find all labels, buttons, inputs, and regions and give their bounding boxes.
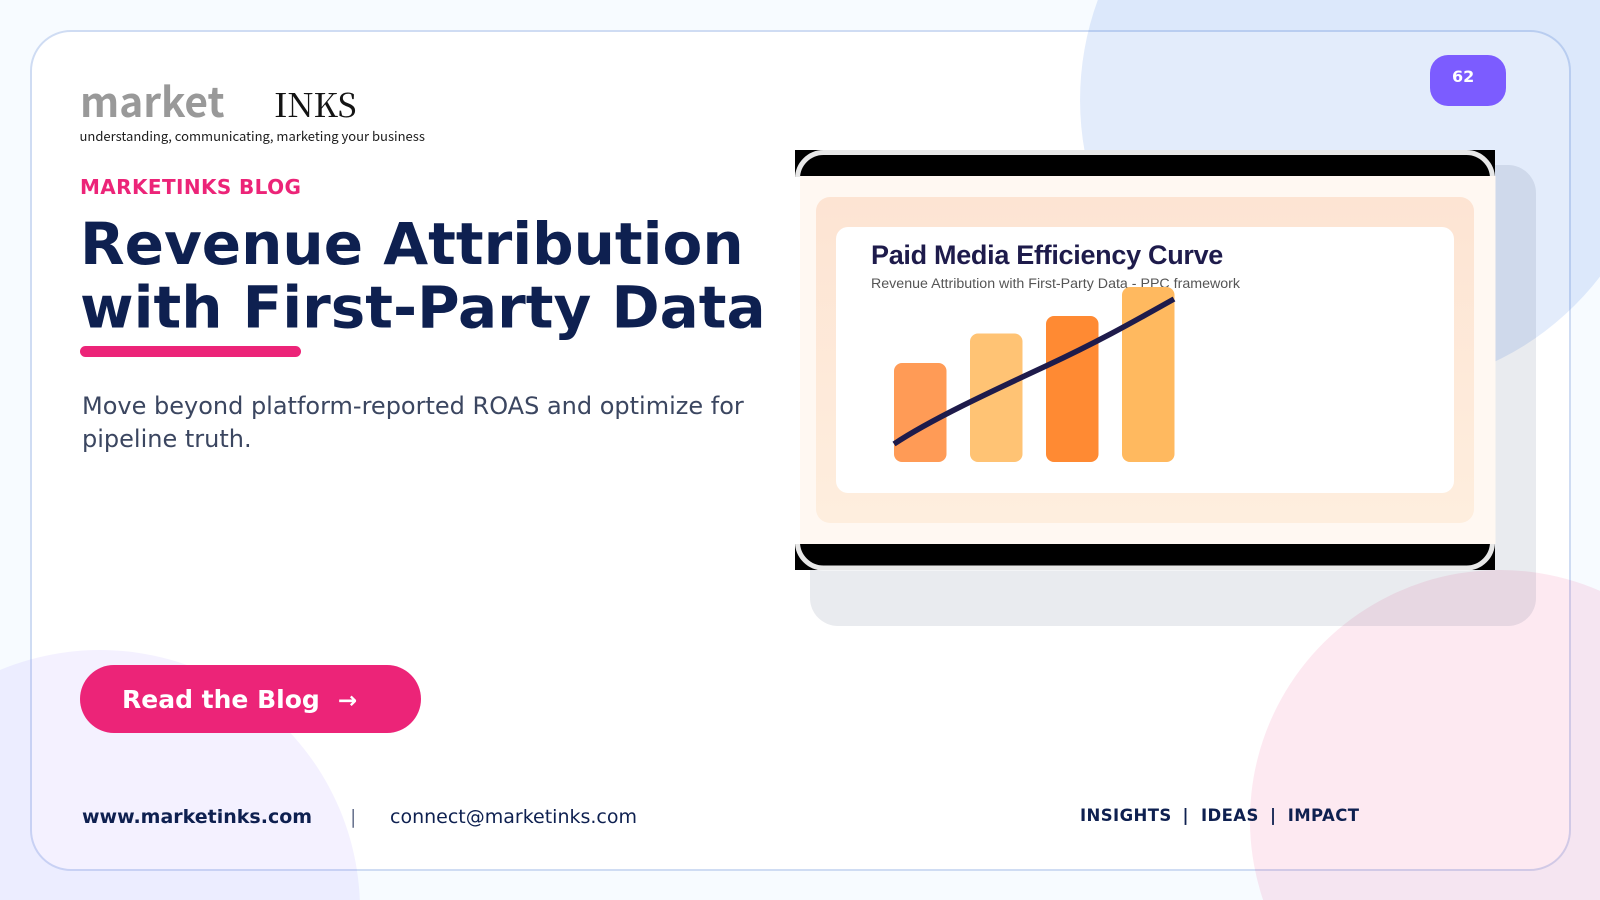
subtitle: pipeline truth.	[82, 425, 252, 453]
headline underline	[80, 346, 301, 357]
decorative blob: top right	[1080, 0, 1600, 390]
image background	[800, 176, 1496, 544]
footer contact: www.marketinks.com	[82, 806, 312, 828]
letterbox bands	[795, 150, 1495, 570]
subtitle: Move beyond platform-reported ROAS and optimize for	[82, 392, 744, 420]
decorative blob: bottom right	[1250, 570, 1600, 900]
framed chart image	[795, 150, 1496, 570]
logo	[80, 70, 425, 145]
footer tagline: IMPACT	[1288, 806, 1360, 825]
footer tagline: INSIGHTS	[1080, 806, 1172, 825]
footer tagline: |	[1270, 806, 1276, 826]
icon: arrow: →	[338, 688, 357, 714]
footer tagline: IDEAS	[1201, 806, 1259, 825]
image frame	[798, 152, 1492, 568]
decorative blob: bottom left	[0, 650, 360, 900]
eyebrow label: MARKETINKS BLOG	[80, 175, 301, 199]
page number badge: 62	[1452, 67, 1474, 86]
white chart card	[836, 227, 1454, 493]
footer contact: |	[350, 806, 356, 828]
footer contact: connect@marketinks.com	[390, 806, 637, 828]
orange panel	[816, 197, 1474, 523]
logo: market	[80, 70, 225, 129]
page number badge	[1430, 55, 1506, 106]
trend line	[894, 299, 1174, 444]
footer contact	[82, 806, 637, 828]
call to action button	[80, 665, 421, 733]
chart title: Paid Media Efficiency Curve	[871, 240, 1223, 270]
logo: understanding, communicating, marketing your business	[80, 126, 425, 145]
footer tagline: |	[1182, 806, 1189, 826]
image shadow panel	[810, 165, 1536, 626]
headline: Revenue Attribution	[80, 210, 744, 278]
logo: INKS	[274, 80, 356, 127]
chart subtitle: Revenue Attribution with First-Party Data - PPC framework	[871, 276, 1241, 292]
call to action button: Read the Blog	[122, 685, 320, 714]
bar chart	[894, 287, 1174, 462]
headline: with First-Party Data	[80, 274, 766, 342]
